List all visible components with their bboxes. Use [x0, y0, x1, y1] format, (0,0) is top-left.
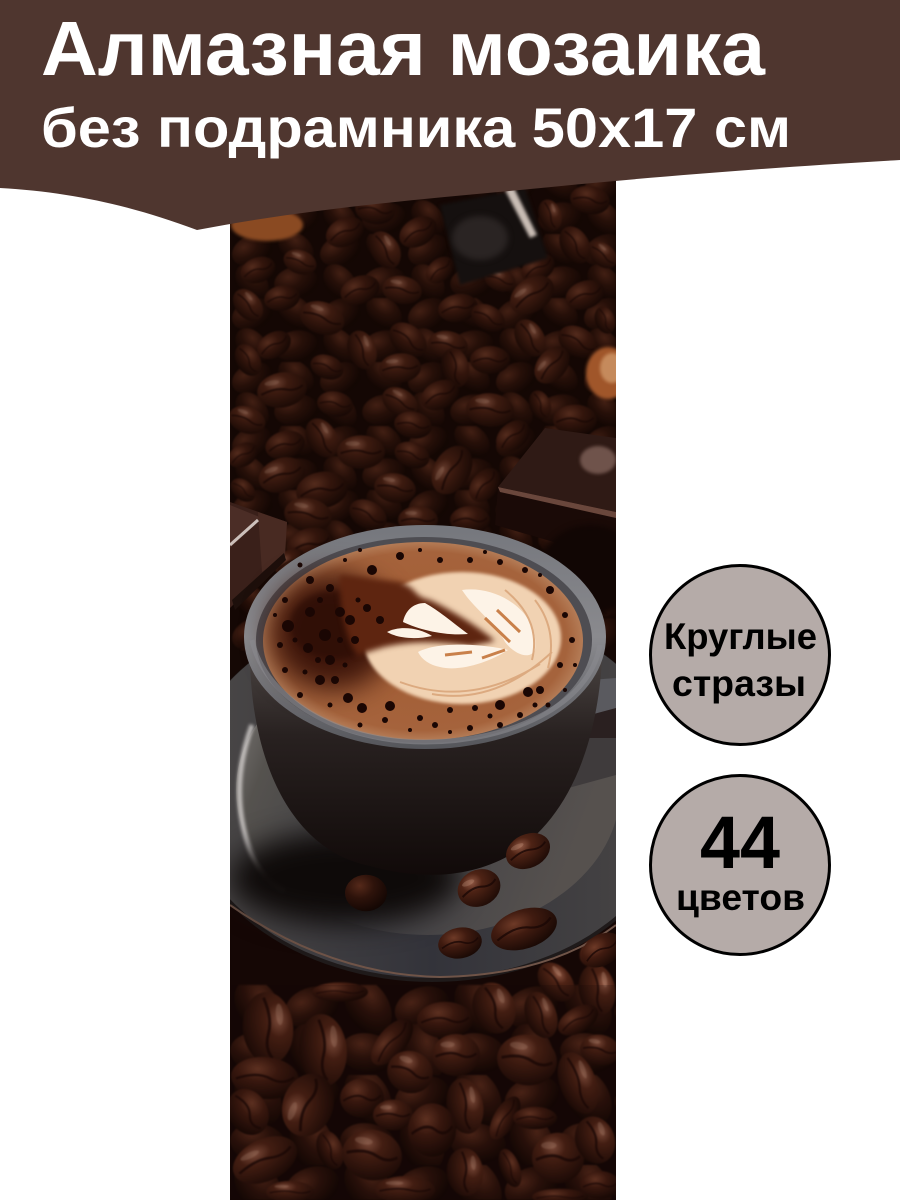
coffee foam with latte art: [263, 542, 583, 740]
cup body: [250, 660, 602, 875]
saucer: [230, 654, 616, 982]
coffee beans on saucer: [345, 826, 562, 962]
dark overlay on upper beans: [230, 170, 616, 650]
badge: round rhinestones: [650, 566, 830, 744]
badge: round rhinestones: Круглые: [664, 616, 817, 657]
cup handle: [570, 678, 616, 788]
beans overlapping saucer right edge: [584, 932, 616, 968]
title: Алмазная мозаика: [41, 6, 766, 92]
cup rim: [244, 525, 606, 749]
photo: coffee cup on beans: [230, 180, 616, 1200]
subtitle: без подрамника 50х17 см: [41, 96, 791, 159]
coffee bubbles: [273, 548, 577, 734]
cup rim lower highlight: [252, 640, 600, 742]
badge: round rhinestones: стразы: [672, 663, 806, 704]
badge: 44 colours: цветов: [676, 877, 805, 918]
latte art: dark notch: [340, 575, 495, 656]
badge: 44 colours: 44: [700, 801, 780, 884]
latte art: bright streaks: [387, 589, 535, 668]
coffee beans: lower field: [230, 932, 616, 1200]
badge: 44 colours: [650, 776, 830, 954]
chocolate tile: top: [440, 188, 548, 285]
header banner: [0, 0, 900, 230]
caramel pieces: [231, 209, 630, 399]
cup shadow on saucer: [230, 832, 460, 924]
latte art: cream shape: [363, 572, 561, 704]
chocolate tile: left: [230, 502, 287, 610]
dark corner upper right of cup: [547, 528, 616, 614]
coffee beans: upper field: [224, 170, 622, 650]
chocolate tile: right: [496, 428, 616, 541]
dark overlay on lower beans: [230, 985, 616, 1200]
